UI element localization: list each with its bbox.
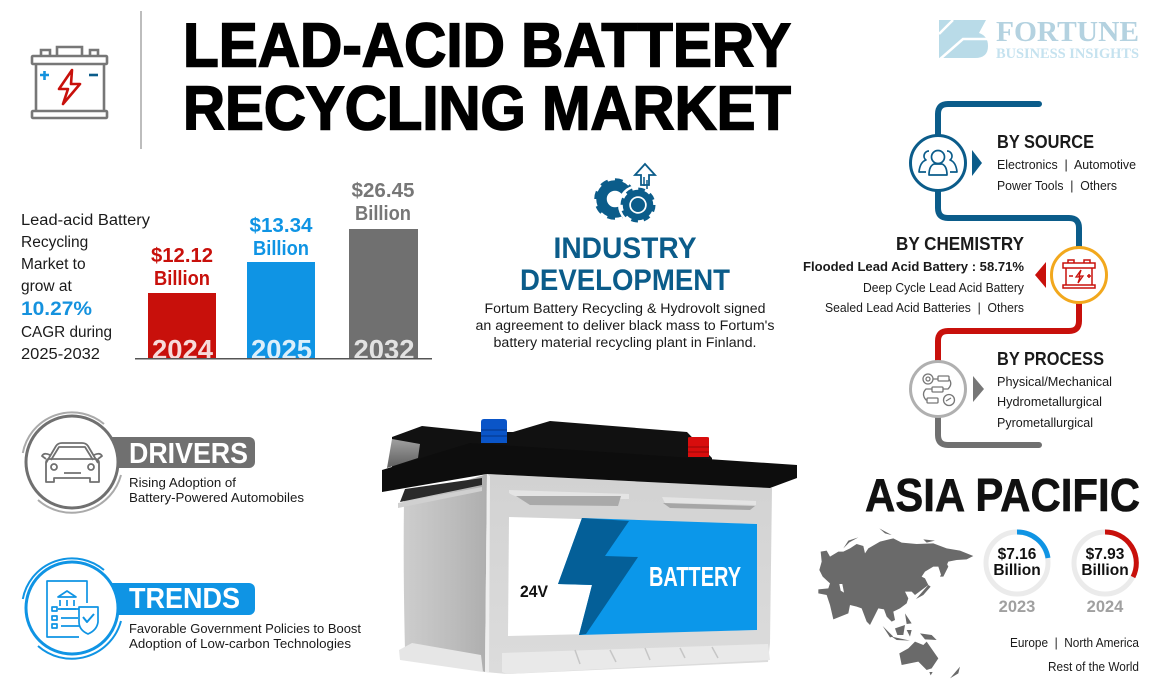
segment: by process: BY PROCESS [997, 349, 1104, 369]
bottom ledge [502, 644, 770, 674]
segment: by source [910, 132, 1136, 193]
heading: Asia Pacific: ASIA PACIFIC [865, 469, 1140, 521]
text block: other regions [1010, 635, 1140, 674]
icon: people [910, 136, 966, 190]
title: LEAD-ACID BATTERY [183, 12, 791, 80]
donut: 2024 [1074, 532, 1136, 616]
icon: policy document in ring [23, 558, 121, 659]
segment: by source: BY SOURCE [997, 132, 1094, 152]
label pill [105, 583, 255, 615]
bar: 2032 [349, 180, 418, 365]
bar: 2024: Billion [154, 268, 210, 290]
divider [140, 11, 142, 149]
icon: car in ring [23, 412, 121, 513]
bar: 2025 [247, 215, 315, 365]
segment: by chemistry: Deep Cycle Lead Acid Battery [863, 280, 1024, 295]
text block: CAGR summary [21, 212, 150, 363]
panel: trends [23, 558, 361, 659]
heading: industry development: DEVELOPMENT [520, 264, 730, 297]
bar chart: market size [135, 180, 432, 365]
text block: CAGR summary: grow at [21, 278, 73, 295]
segment: by chemistry: BY CHEMISTRY [896, 234, 1024, 254]
segment: by chemistry: Sealed Lead Acid Batteries | Others [825, 300, 1024, 315]
donut: 2024: $7.93 [1086, 546, 1125, 563]
heading: industry development [520, 232, 730, 297]
donut: 2023: Billion [993, 562, 1041, 579]
text block: CAGR summary: 2025-2032 [21, 346, 100, 363]
handles [509, 490, 629, 499]
text block: other regions: Rest of the World [1048, 659, 1139, 674]
icon: battery [1052, 248, 1106, 302]
text block: industry development [476, 301, 775, 350]
text block: CAGR summary: Market to [21, 256, 86, 273]
bar: 2025: 2025 [251, 334, 312, 365]
label [508, 517, 757, 636]
segmentation connector lines [938, 104, 1079, 445]
panel: drivers: Rising Adoption of [129, 475, 236, 490]
icon: car battery [32, 47, 107, 118]
segment: by chemistry [803, 234, 1106, 315]
title [183, 12, 791, 144]
segment: by process: Physical/Mechanical [997, 374, 1112, 389]
logo: Fortune Business Insights: BUSINESS INSIGHTS [996, 46, 1139, 62]
donut: 2023 [986, 532, 1048, 616]
logo: Fortune Business Insights: FORTUNE [996, 17, 1139, 48]
text block: CAGR summary: Lead-acid Battery [21, 212, 150, 229]
bar: 2024: $12.12 [151, 245, 213, 267]
text block: CAGR summary: Recycling [21, 234, 88, 251]
text block: industry development: an agreement to deliver black mass to Fortum's [476, 318, 775, 333]
illustration: 24V battery [382, 419, 797, 674]
text block: industry development: Fortum Battery Recycling & Hydrovolt signed [484, 301, 766, 316]
illustration: 24V battery: BATTERY [649, 561, 741, 592]
bar: 2032: Billion [355, 203, 411, 225]
segment: by source: Electronics | Automotive [997, 157, 1136, 172]
panel: drivers: Battery-Powered Automobiles [129, 490, 304, 505]
segment: by process: Pyrometallurgical [997, 415, 1093, 430]
panel: trends: Favorable Government Policies to Boost [129, 621, 361, 636]
back lid [392, 421, 712, 470]
donut: 2024: 2024 [1087, 598, 1124, 616]
bar: 2024: 2024 [152, 334, 213, 365]
bar: 2025: Billion [253, 238, 309, 260]
segment: by process [910, 349, 1112, 430]
bar: 2025: $13.34 [250, 215, 313, 237]
bar: 2032: 2032 [354, 334, 414, 365]
donut: 2023: $7.16 [998, 546, 1037, 563]
segment: by process: Hydrometallurgical [997, 394, 1102, 409]
text block: CAGR summary: 10.27% [21, 298, 92, 320]
panel: drivers: DRIVERS [129, 438, 248, 470]
donut: 2024: Billion [1081, 562, 1129, 579]
donut: 2023: 2023 [999, 598, 1035, 616]
heading: industry development: INDUSTRY [554, 232, 696, 265]
text block: industry development: battery material recycling plant in Finland. [494, 335, 756, 350]
logo: Fortune Business Insights [939, 17, 1139, 62]
bar: 2032: $26.45 [352, 180, 414, 202]
segment: by source: Power Tools | Others [997, 178, 1117, 193]
battery body left [404, 474, 487, 672]
illustration: 24V battery: 24V [520, 582, 549, 601]
battery body front [485, 474, 772, 674]
panel: trends: Adoption of Low-carbon Technologies [129, 636, 352, 651]
text block: other regions: Europe | North America [1010, 635, 1140, 650]
panel: drivers [23, 412, 304, 513]
text block: CAGR summary: CAGR during [21, 324, 112, 341]
top lid [382, 443, 797, 492]
panel: trends: TRENDS [129, 583, 240, 615]
icon: process flow [910, 362, 966, 416]
bar: 2024 [148, 245, 216, 365]
segment: by chemistry: Flooded Lead Acid Battery : 58.71% [803, 259, 1024, 274]
map: Asia Pacific [818, 528, 973, 678]
icon: gears with arrow [596, 164, 658, 225]
terminals [481, 419, 709, 457]
title: RECYCLING MARKET [183, 74, 791, 144]
label pill [105, 437, 255, 468]
